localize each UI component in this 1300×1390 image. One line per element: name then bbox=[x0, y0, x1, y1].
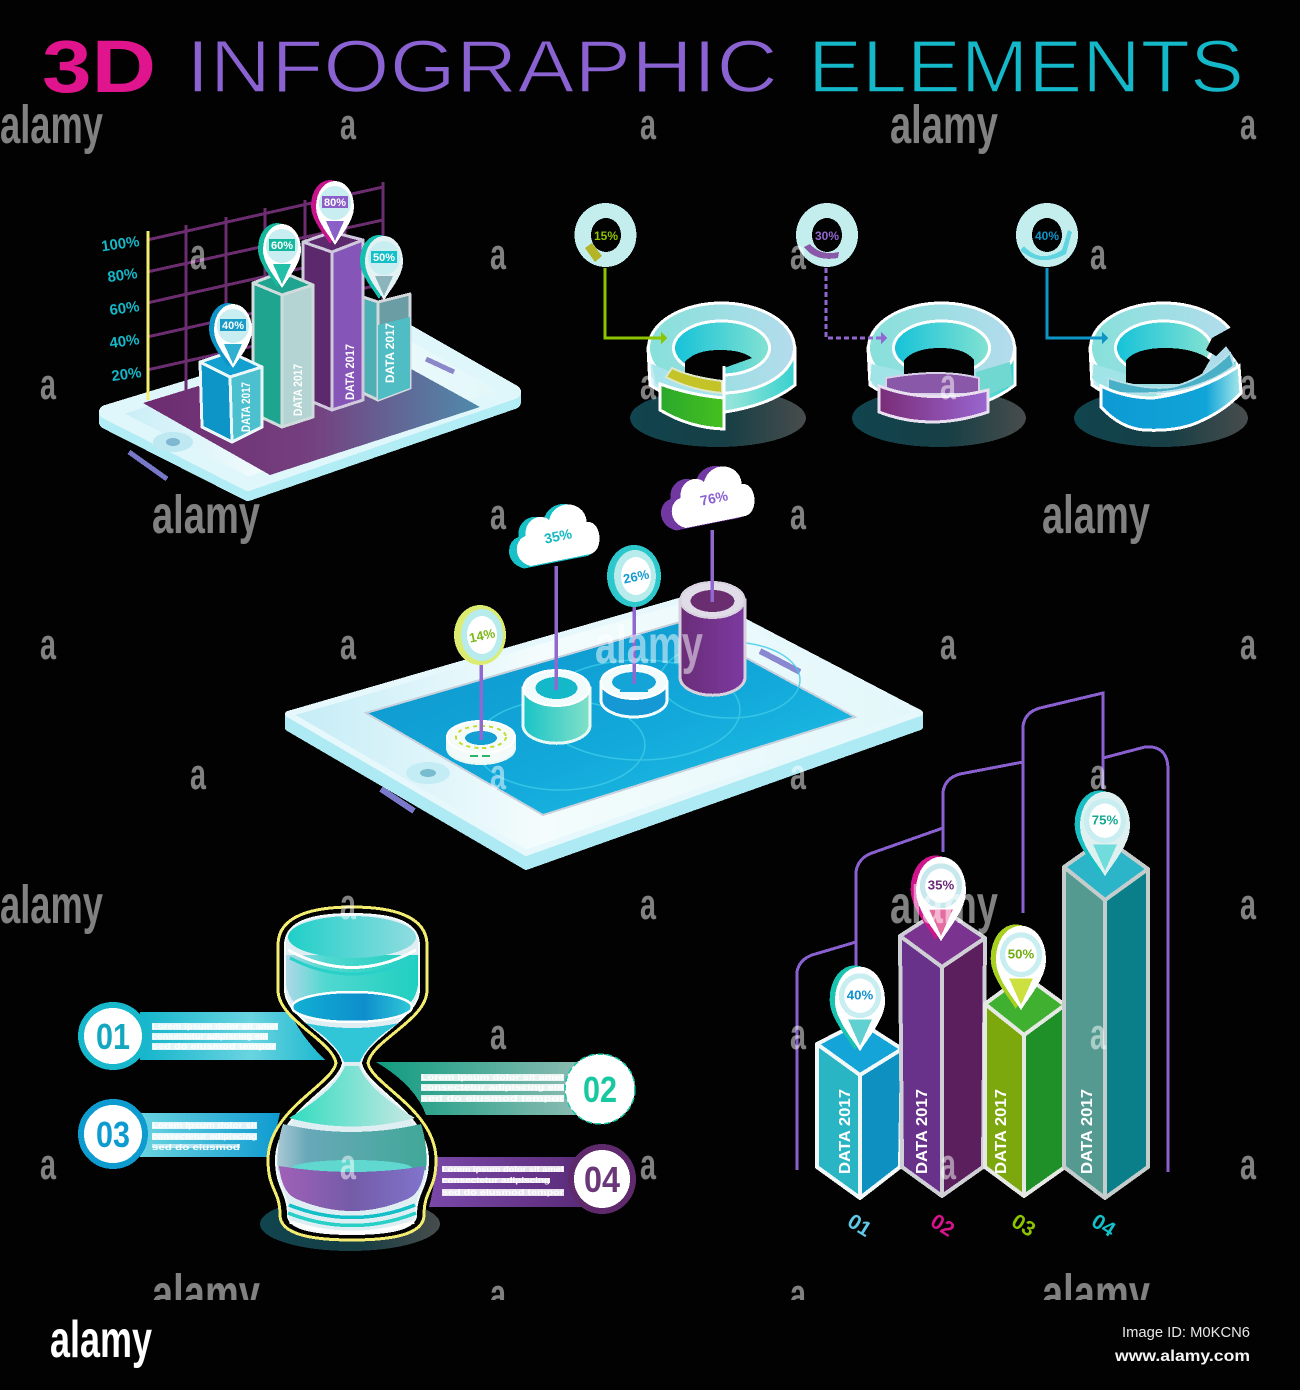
footer logo: alamy bbox=[50, 1311, 152, 1369]
ring 3 blue bbox=[1074, 303, 1250, 447]
axis number 01: 01 bbox=[843, 1210, 876, 1242]
watermark pattern: a bbox=[190, 230, 206, 279]
axis labels: 80% bbox=[106, 265, 139, 286]
pin: bar 1: 40% bbox=[222, 320, 244, 332]
watermark pattern: alamy bbox=[0, 95, 103, 155]
step band 04 bbox=[429, 1157, 587, 1207]
watermark pattern: alamy bbox=[0, 875, 103, 935]
step band 02: consectetur adipiscing elit bbox=[421, 1083, 564, 1092]
callout 26% bbox=[607, 545, 661, 607]
watermark pattern: a bbox=[490, 490, 506, 539]
badge 01 bbox=[81, 1005, 145, 1067]
watermark pattern: a bbox=[340, 620, 356, 669]
watermark pattern: a bbox=[340, 880, 356, 929]
title: ELEMENTS bbox=[808, 25, 1244, 108]
callout 14% bbox=[454, 605, 506, 665]
callout 15% with connector bbox=[574, 203, 667, 344]
axis labels: 100% bbox=[100, 233, 141, 255]
percent grid bbox=[147, 182, 383, 390]
pin: bar 2 bbox=[258, 223, 301, 288]
panel: tablet with cylinders bbox=[288, 466, 920, 867]
watermark pattern: a bbox=[1090, 1010, 1106, 1059]
bar 1: DATA 2017 bbox=[239, 382, 253, 432]
pin: bar 2: 60% bbox=[271, 240, 293, 252]
step band 01: Lorem ipsum dolor sit amet bbox=[152, 1022, 278, 1031]
step band 01: consectetur adipiscing elit bbox=[152, 1032, 268, 1041]
callout 26%: 26% bbox=[622, 566, 651, 587]
pin: 40% bbox=[830, 965, 885, 1051]
watermark pattern: a bbox=[790, 1010, 806, 1059]
step band 04: consectetur adipiscing bbox=[442, 1176, 550, 1185]
watermark pattern: a bbox=[190, 750, 206, 799]
step band 01 bbox=[140, 1012, 325, 1060]
step band 03 bbox=[140, 1113, 280, 1157]
watermark pattern: a bbox=[790, 1270, 806, 1319]
watermark pattern: a bbox=[340, 100, 356, 149]
purple sand bbox=[279, 1166, 425, 1211]
axis labels bbox=[100, 233, 143, 385]
watermark pattern: alamy bbox=[1042, 485, 1150, 545]
upper funnel bbox=[305, 1023, 399, 1062]
lower band bbox=[278, 1124, 426, 1170]
watermark pattern: a bbox=[790, 750, 806, 799]
watermark pattern: a bbox=[1240, 880, 1256, 929]
pin: bar 3: 80% bbox=[324, 197, 346, 209]
pin: 50%: 50% bbox=[1008, 947, 1034, 962]
watermark pattern: a bbox=[940, 1140, 956, 1189]
watermark pattern: a bbox=[1090, 750, 1106, 799]
panel: hourglass steps bbox=[81, 907, 635, 1251]
pin: 40%: 40% bbox=[847, 988, 873, 1003]
badge 02 bbox=[565, 1054, 635, 1124]
step band 02 bbox=[376, 1062, 587, 1115]
disc 1 bbox=[447, 721, 515, 764]
phone body bbox=[106, 324, 514, 494]
badge 04 bbox=[571, 1147, 633, 1211]
connector lines bbox=[797, 693, 1168, 1172]
title: 3D bbox=[42, 25, 156, 108]
badge 01: 01 bbox=[96, 1016, 130, 1057]
watermark pattern: a bbox=[40, 1140, 56, 1189]
callout 40% with connector: 40% bbox=[1035, 229, 1059, 243]
cloud callout 76%: 76% bbox=[699, 487, 730, 509]
axis labels: 60% bbox=[108, 298, 141, 319]
watermark pattern: alamy bbox=[890, 95, 998, 155]
cylinder 3 bbox=[601, 665, 667, 717]
watermark pattern: a bbox=[490, 230, 506, 279]
watermark pattern: a bbox=[1240, 1140, 1256, 1189]
watermark pattern: a bbox=[40, 620, 56, 669]
bar 1 label: DATA 2017 bbox=[837, 1089, 854, 1174]
pin: 35%: 35% bbox=[928, 878, 954, 893]
step band 02: sed do eiusmod tempor bbox=[421, 1094, 564, 1103]
lower funnel bbox=[289, 1066, 415, 1126]
stems bbox=[481, 530, 712, 740]
bar 2 bbox=[253, 272, 313, 427]
step band 04: Lorem ipsum dolor sit amet bbox=[442, 1165, 564, 1174]
axis number 02: 02 bbox=[926, 1210, 958, 1242]
screen ripples bbox=[475, 642, 800, 790]
watermark pattern: a bbox=[640, 100, 656, 149]
cylinder 2 bbox=[523, 670, 590, 743]
pin: 75%: 75% bbox=[1092, 813, 1118, 828]
step band 04: sed do eiusmod tempor bbox=[442, 1188, 564, 1197]
watermark pattern: a bbox=[940, 360, 956, 409]
watermark pattern: a bbox=[340, 1140, 356, 1189]
bar 2 label: DATA 2017 bbox=[914, 1089, 931, 1174]
bar 4: DATA 2017 bbox=[383, 323, 397, 383]
watermark pattern: alamy bbox=[152, 1264, 260, 1324]
step band 01: sed do eiusmod tempor bbox=[152, 1042, 276, 1051]
badge 04: 04 bbox=[584, 1159, 620, 1200]
panel: phone bar chart bbox=[100, 180, 514, 494]
ring 1 green bbox=[630, 303, 806, 447]
callout 15% with connector: 15% bbox=[594, 229, 618, 243]
panel: ring charts bbox=[574, 203, 1250, 447]
pin: 75% bbox=[1075, 790, 1130, 876]
watermark pattern: alamy bbox=[152, 485, 260, 545]
hourglass shadow bbox=[260, 1197, 440, 1251]
badge 03 bbox=[81, 1102, 145, 1166]
base stripes bbox=[288, 1205, 416, 1232]
bar 3 bbox=[303, 232, 363, 410]
bar 1 bbox=[817, 1022, 902, 1198]
pin: bar 3 bbox=[311, 180, 354, 245]
axis labels: 40% bbox=[108, 331, 141, 352]
glass body bbox=[276, 914, 428, 1234]
pin: bar 4: 50% bbox=[373, 252, 395, 264]
y axis bbox=[146, 231, 150, 400]
axis number 03: 03 bbox=[1007, 1210, 1039, 1242]
cloud callout 35% bbox=[509, 504, 600, 568]
watermark pattern: a bbox=[640, 1140, 656, 1189]
pin: 50% bbox=[991, 924, 1046, 1010]
watermark pattern: a bbox=[490, 1010, 506, 1059]
cloud callout 76% bbox=[661, 466, 755, 530]
watermark pattern: alamy bbox=[1042, 1264, 1150, 1324]
ring 2 purple bbox=[852, 303, 1026, 447]
pin: bar 1 bbox=[209, 303, 252, 368]
bar 4 label: DATA 2017 bbox=[1079, 1089, 1096, 1174]
step band 03: consectetur adipiscing bbox=[152, 1132, 257, 1141]
step band 03: sed do eiusmod bbox=[152, 1143, 240, 1152]
title bbox=[42, 25, 1244, 108]
callout 40% with connector bbox=[1016, 203, 1108, 344]
step band 03: Lorem ipsum dolor sit bbox=[152, 1121, 257, 1130]
watermark pattern: alamy bbox=[890, 875, 998, 935]
yellow outline bbox=[268, 907, 436, 1240]
bar 2 bbox=[900, 909, 985, 1196]
footer image id: Image ID: M0KCN6 bbox=[1122, 1324, 1250, 1341]
watermark pattern: a bbox=[790, 490, 806, 539]
bar 4 bbox=[363, 294, 410, 400]
watermark pattern: a bbox=[490, 1270, 506, 1319]
tablet body bbox=[288, 596, 920, 867]
watermark pattern: a bbox=[490, 750, 506, 799]
footer url: www.alamy.com bbox=[1114, 1348, 1250, 1365]
bar 2: DATA 2017 bbox=[291, 364, 305, 416]
watermark pattern: a bbox=[40, 360, 56, 409]
upper band bbox=[286, 955, 418, 1015]
cloud callout 35%: 35% bbox=[543, 525, 574, 547]
callout 30% with connector bbox=[796, 203, 887, 344]
watermark pattern: a bbox=[1090, 230, 1106, 279]
bar 3 bbox=[985, 975, 1065, 1196]
watermark pattern: a bbox=[640, 360, 656, 409]
watermark pattern: a bbox=[1240, 620, 1256, 669]
axis number 04: 04 bbox=[1087, 1210, 1120, 1242]
badge 03: 03 bbox=[96, 1114, 130, 1155]
title: INFOGRAPHIC bbox=[186, 25, 778, 108]
hourglass bbox=[268, 907, 436, 1240]
cylinder 4 bbox=[680, 582, 745, 695]
watermark pattern: a bbox=[940, 620, 956, 669]
watermark pattern: a bbox=[1240, 360, 1256, 409]
step band 02: Lorem ipsum dolor sit amet bbox=[421, 1073, 564, 1082]
watermark pattern: alamy bbox=[595, 615, 703, 675]
callout 30% with connector: 30% bbox=[815, 229, 839, 243]
pin: 35% bbox=[911, 855, 966, 941]
watermark pattern: a bbox=[1240, 100, 1256, 149]
panel: tall bar chart bbox=[797, 693, 1168, 1242]
bar 4 bbox=[1064, 838, 1148, 1198]
pin: bar 4 bbox=[360, 235, 403, 300]
watermark pattern: a bbox=[640, 880, 656, 929]
callout 14%: 14% bbox=[468, 625, 497, 646]
badge 02: 02 bbox=[583, 1069, 617, 1110]
watermark pattern: a bbox=[790, 230, 806, 279]
bar 3 label: DATA 2017 bbox=[993, 1089, 1010, 1174]
bar 1 bbox=[200, 352, 262, 442]
axis labels: 20% bbox=[110, 364, 143, 385]
bar 3: DATA 2017 bbox=[343, 344, 357, 400]
